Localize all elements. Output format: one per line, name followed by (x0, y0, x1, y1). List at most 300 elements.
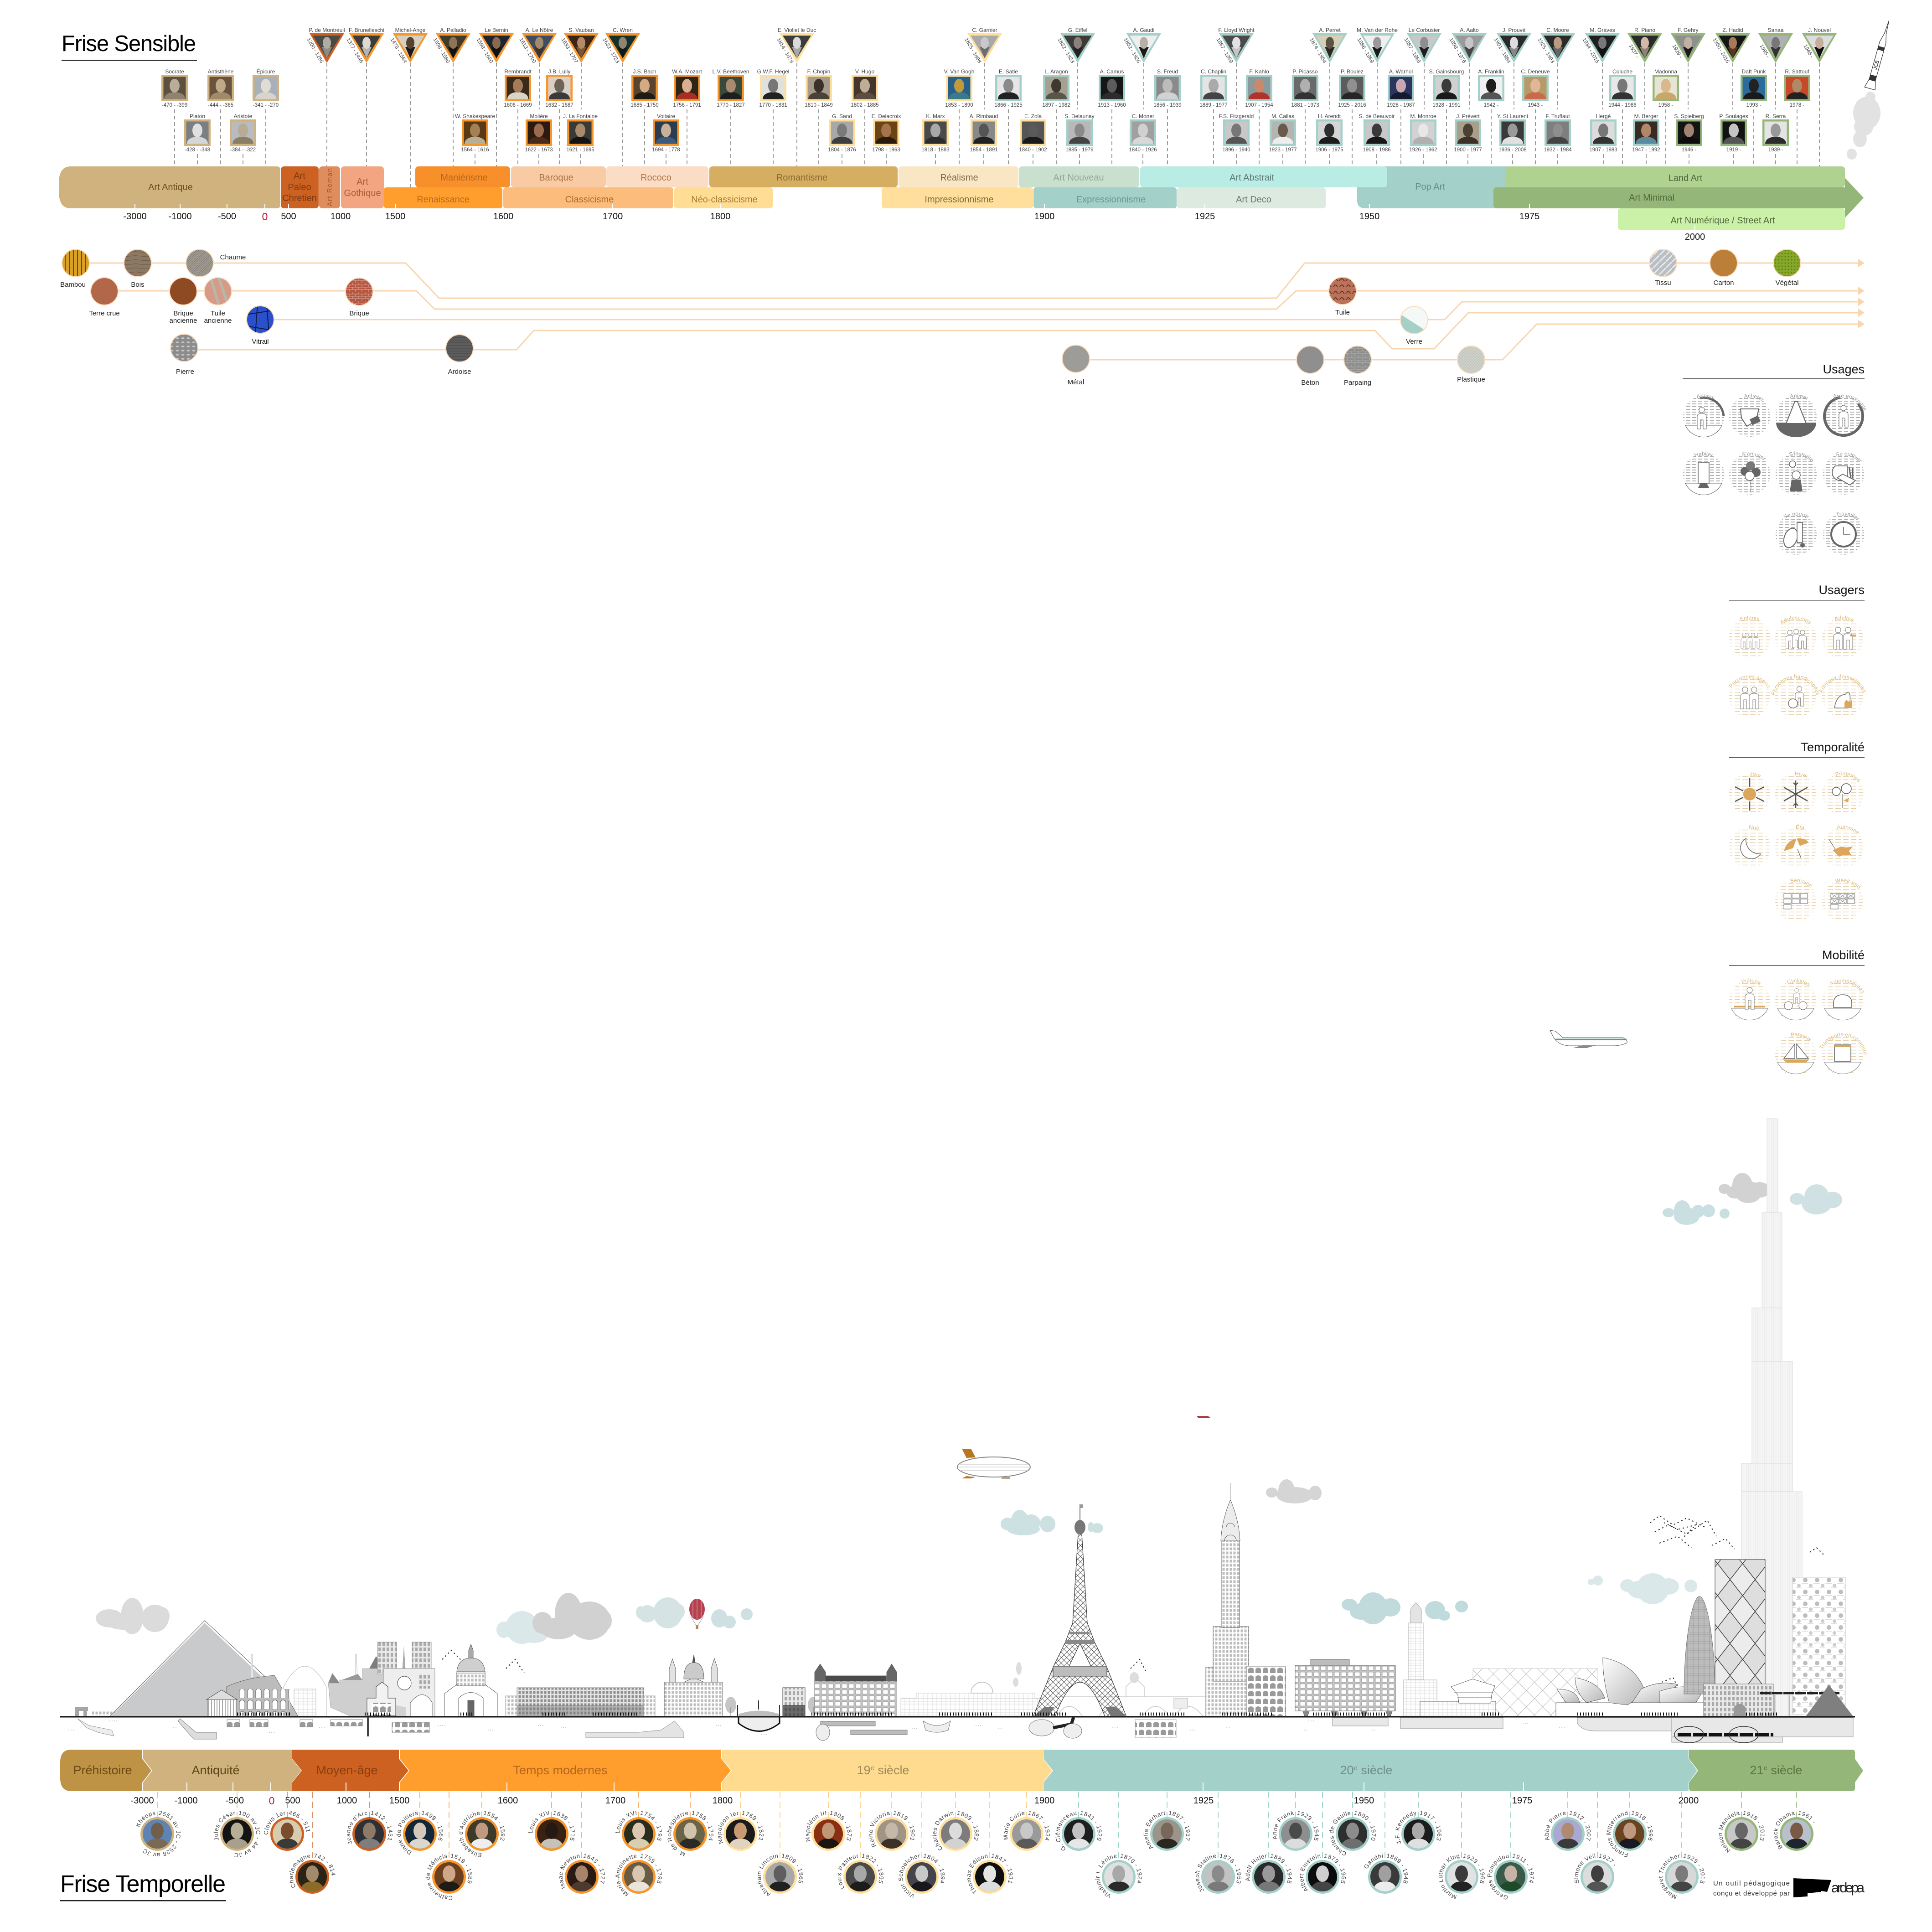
icon: Abriter (1683, 393, 1724, 437)
portrait: A. Palladio: 1508 - 1580 (432, 37, 450, 64)
portrait: Isaac Newton (557, 1852, 606, 1894)
portrait: Sanaa: 1995 - (1758, 44, 1771, 59)
top time axis: 1500 (385, 212, 405, 222)
portrait: Molière (525, 113, 553, 153)
portrait: Nelson Mandela (1717, 1809, 1766, 1854)
portrait: Joseph Staline (1193, 1852, 1243, 1894)
panel: triangular architect portraits (305, 27, 1837, 64)
portrait: E. Delacroix (872, 113, 901, 153)
portrait: M. Callas: M. Callas (1271, 113, 1294, 119)
heading: Mobilité: Mobilité (1822, 948, 1865, 962)
portrait: R. Sattouf (1784, 68, 1810, 108)
portrait: J. Prouvé: 1901 - 1984 (1493, 37, 1512, 64)
portrait: A. Camus: A. Camus (1100, 68, 1124, 75)
portrait: M. Berger: M. Berger (1634, 113, 1658, 119)
portrait: Le Corbusier: 1887 - 1965 (1403, 37, 1421, 64)
portrait: A. Franklin: A. Franklin (1478, 68, 1504, 75)
portrait: E. Satie: 1866 - 1925 (994, 103, 1023, 108)
top time axis: 500 (281, 212, 296, 222)
bottom time axis: 1800 (713, 1796, 733, 1806)
portrait: F. Chopin: 1810 - 1849 (805, 103, 833, 108)
monument: Romanesque castle (328, 1656, 396, 1716)
portrait: C. Moore (1536, 27, 1575, 64)
portrait: Sanaa: Sanaa (1768, 27, 1784, 33)
monument: domed basilica (444, 1644, 497, 1716)
portrait: P. Soulages: 1919 - (1726, 147, 1741, 153)
portrait: M. Callas (1269, 113, 1297, 153)
portrait: J.S. Bach (630, 68, 659, 108)
portrait: Abraham Lincoln: Abraham Lincoln (755, 1852, 779, 1898)
portrait: F. Brunelleschi: 1377 - 1446 (345, 37, 364, 64)
building: Guggenheim (1420, 1679, 1496, 1717)
portrait: Clovis 1er: Clovis 1er (263, 1809, 286, 1835)
portrait: E. Viollet le Duc (775, 27, 816, 64)
portrait: R. Piano: R. Piano (1634, 27, 1655, 33)
icon: Piétons: Piétons (1741, 977, 1762, 986)
portrait: Anne Frank: 1929 - 1945 (1297, 1809, 1320, 1842)
portrait: E. Zola: 1840 - 1902 (1019, 147, 1047, 153)
cloud: top blue left (1663, 1200, 1730, 1225)
portrait: S. de Beauvoir: 1908 - 1986 (1363, 147, 1391, 153)
bar: 19e siècle: siècle (874, 1763, 909, 1777)
cloud: pale blue right (1588, 1573, 1697, 1604)
material: Bois (124, 249, 151, 289)
portrait: Antisthène (207, 68, 234, 108)
portrait: Hergé (1589, 113, 1617, 153)
portrait: A. Palladio (432, 27, 470, 64)
bar: Art Deco (1177, 187, 1326, 208)
bar: Moyen-âge (292, 1750, 408, 1791)
portrait: Charlemagne: Charlemagne (288, 1852, 311, 1889)
underground: parking and tunnels (1333, 1718, 1853, 1742)
icon: Acheter: Acheter (1743, 393, 1765, 403)
portrait: E. Viollet le Duc: E. Viollet le Duc (778, 27, 816, 33)
icon: Automne: Automne (1836, 824, 1861, 836)
bar: Art Numérique / Street Art: Art Numérique / Street Art (1671, 216, 1775, 226)
panel: Temporalité (1729, 740, 1865, 921)
panel: materials (60, 249, 1801, 387)
material: Bois: Bois (131, 281, 145, 289)
portrait: Margaret Thatcher: Margaret Thatcher (1657, 1852, 1680, 1901)
portrait: François Mitterrand: François Mitterrand (1605, 1809, 1629, 1859)
portrait: J.B. Lully: 1632 - 1687 (545, 103, 573, 108)
portrait: M. de Robespierre: M. de Robespierre (666, 1809, 689, 1858)
portrait: Y. St Laurent (1497, 113, 1529, 153)
bottom time axis: -500 (226, 1796, 244, 1806)
portrait: S. Freud (1153, 68, 1182, 108)
material: Plastique (1457, 346, 1485, 383)
portrait: A. Palladio: A. Palladio (440, 27, 466, 33)
building: Crystal Palace (901, 1662, 1040, 1717)
bar: Antiquité: Antiquité (191, 1763, 240, 1777)
portrait: A. Warhol (1387, 68, 1415, 108)
portrait: V. Hugo: V. Hugo (855, 68, 874, 75)
material: Vitrail (246, 305, 274, 344)
portrait: L. Aragon: 1897 - 1982 (1042, 103, 1070, 108)
building: Burj Khalifa (1741, 1119, 1802, 1717)
portrait: Khéops: 2551 av JC - 2528 av JC (141, 1809, 182, 1859)
credit and logo: Un outil pédagogique (1713, 1880, 1790, 1887)
icon: Se nourrir (1776, 511, 1817, 555)
bridge (738, 1700, 780, 1731)
bar: Art Abstrait (1140, 166, 1387, 187)
bar: Temps modernes (400, 1750, 731, 1791)
material: Verre: Verre (1406, 338, 1422, 346)
bar: Art Paleo Chretien: Art (294, 171, 305, 181)
portrait: Sanaa (1758, 27, 1793, 63)
portrait: J. Prouvé (1493, 27, 1531, 64)
bar: Art Gothique (341, 166, 384, 208)
portrait: Voltaire: Voltaire (657, 113, 675, 119)
portrait: S. de Beauvoir: S. de Beauvoir (1359, 113, 1395, 119)
portrait: Isaac Newton: 1643 - 1727 (583, 1852, 606, 1885)
portrait: Vladimir I. Lénine: 1870 - 1924 (1120, 1852, 1143, 1885)
portrait: Amelia Earhart: Amelia Earhart (1142, 1809, 1166, 1851)
bottom time axis: 500 (285, 1796, 300, 1806)
bottom time axis: 1500 (389, 1796, 409, 1806)
portrait: Nelson Mandela: Nelson Mandela (1717, 1809, 1741, 1854)
bar: Baroque (511, 166, 606, 187)
cloud: blue behind grey (496, 1611, 547, 1644)
portrait: Victor Schoelcher: 1804 - 1894 (923, 1852, 946, 1885)
portrait: Abraham Lincoln: 1809 - 1865 (781, 1852, 805, 1885)
bar: 21e siècle (1689, 1750, 1863, 1791)
portrait: P. Picasso: P. Picasso (1292, 68, 1318, 75)
material: Brique: Brique (349, 310, 369, 317)
bar: Romantisme (709, 166, 898, 187)
portrait: Georges Pompidou (1486, 1852, 1535, 1901)
portrait: M. Graves (1581, 27, 1620, 64)
title: Frise Sensible: Frise Sensible (62, 31, 196, 56)
portrait: A. Camus (1098, 68, 1126, 108)
portrait: Platon: Platon (190, 113, 205, 119)
panel: square portraits lower row (184, 113, 1789, 153)
bar: Art Roman: Art Roman (326, 167, 334, 207)
portrait: Diane de Poitiers: Diane de Poitiers (395, 1809, 419, 1856)
portrait: E. Zola (1019, 113, 1047, 153)
bar: Art Minimal arrow: Art Minimal (1629, 193, 1674, 203)
icon: Printemps: Printemps (1834, 770, 1862, 783)
portrait: G. Eiffel: 1832 - 1923 (1056, 37, 1075, 64)
portrait: Adolf Hitler: Adolf Hitler (1244, 1852, 1267, 1881)
material: Végétal: Végétal (1776, 279, 1798, 287)
portrait: Madonna: 1958 - (1658, 103, 1673, 108)
bar: Antiquité (143, 1750, 301, 1791)
portrait: Marie Curie (1002, 1809, 1051, 1851)
portrait: Épicure: -341 - -270 (253, 103, 279, 108)
portrait: M. Graves: M. Graves (1590, 27, 1615, 33)
monument: Colosseum (227, 1675, 298, 1716)
portrait: S. Gainsbourg (1429, 68, 1464, 108)
portrait: G. Eiffel: G. Eiffel (1068, 27, 1087, 33)
material: Bambou (60, 249, 89, 289)
portrait: Louis Pasteur (836, 1852, 885, 1894)
portrait: Aristote: Aristote (234, 113, 253, 119)
icon: Automne (1822, 824, 1863, 868)
portrait: Margaret Thatcher: 1925 - 2013 (1683, 1852, 1706, 1885)
portrait: Molière: 1622 - 1673 (525, 147, 553, 153)
portrait: S. Gainsbourg: S. Gainsbourg (1429, 68, 1464, 75)
portrait: Albert Einstein: 1879 - 1955 (1323, 1852, 1347, 1885)
portrait: A. Franklin (1478, 68, 1504, 108)
portrait: G.W.F. Hegel: 1770 - 1831 (759, 103, 787, 108)
portrait: Charlemagne: 742 - 814 (313, 1852, 337, 1876)
portrait: Adolf Hitler (1244, 1852, 1293, 1894)
portrait: Michel-Ange (389, 27, 428, 64)
portrait: G. Sand: G. Sand (832, 113, 852, 119)
portrait: Rembrandt (504, 68, 532, 108)
portrait: Catherine de Médicis (424, 1852, 474, 1901)
icon: Abriter: Abriter (1696, 393, 1715, 401)
portrait: G. Clémenceau (1054, 1809, 1103, 1852)
portrait: Abbé Pierre: Abbé Pierre (1543, 1809, 1567, 1841)
building: Unité d'habitation (1295, 1659, 1395, 1716)
portrait: C. Garnier: 1825 - 1898 (963, 37, 982, 64)
portrait: Aristote: -384 - -322 (230, 147, 256, 153)
portrait: Louis XIV: 1638 - 1715 (553, 1809, 576, 1842)
portrait: C. Moore: C. Moore (1546, 27, 1569, 33)
bar: 19e siècle (722, 1750, 1052, 1791)
portrait: C. Deneuve (1521, 68, 1550, 108)
portrait: F. Lloyd Wright: 1867 - 1959 (1215, 37, 1234, 64)
portrait: Joseph Staline: 1878 - 1953 (1219, 1852, 1243, 1885)
portrait: S. Freud: 1856 - 1939 (1153, 103, 1182, 108)
material: Béton (1297, 346, 1324, 387)
portrait: C. Garnier: C. Garnier (972, 27, 997, 33)
portrait: F. Gehry (1671, 27, 1705, 63)
underground: cave (77, 1719, 114, 1736)
bar: Néo-classicisme: Néo-classicisme (691, 195, 758, 205)
bar: Art Paleo Chretien: Chretien (282, 193, 317, 203)
portrait: Khéops: Khéops (134, 1809, 156, 1828)
portrait: J.F. Kennedy: 1917 - 1963 (1419, 1809, 1443, 1842)
bar: Renaissance (384, 187, 502, 208)
portrait: C. Chaplin (1199, 68, 1228, 108)
portrait: E. Delacroix: 1798 - 1863 (872, 147, 900, 153)
portrait: Napoléon III (804, 1809, 853, 1851)
portrait: R. Piano (1627, 27, 1662, 63)
portrait: F. Truffaut: F. Truffaut (1545, 113, 1570, 119)
portrait: J.F. Kennedy: J.F. Kennedy (1394, 1809, 1417, 1845)
panel: historic figures (134, 1809, 1818, 1901)
underground: soil specks (68, 1721, 1565, 1735)
portrait: Barack Obama: Barack Obama (1772, 1809, 1796, 1851)
portrait: Victor Schoelcher (897, 1852, 946, 1900)
portrait: Louis Pasteur: Louis Pasteur (836, 1852, 859, 1891)
bar: Rococo (606, 166, 708, 187)
icon: S'amuser (1729, 450, 1770, 495)
zeppelin (957, 1449, 1030, 1479)
portrait: G.W.F. Hegel: G.W.F. Hegel (757, 68, 789, 75)
portrait: P. de Montreuil: P. de Montreuil (309, 27, 345, 33)
portrait: L.V. Beethoven: 1770 - 1827 (717, 103, 745, 108)
portrait: M. Monroe: 1926 - 1962 (1409, 147, 1437, 153)
rocket and smoke: JCB (1873, 60, 1880, 70)
portrait: M. Van der Rohe: 1886 - 1969 (1356, 37, 1374, 64)
bottom time axis: 1600 (498, 1796, 518, 1806)
panel: art movement bars (59, 166, 1864, 230)
bottom time axis: 1975 (1512, 1796, 1532, 1806)
heading: Temporalité: Temporalité (1801, 740, 1865, 754)
icon: Personnes âgées: Personnes âgées (1728, 673, 1772, 689)
portrait: A. Le Nôtre: A. Le Nôtre (526, 27, 553, 33)
portrait: R. Piano: 1937 - (1627, 44, 1640, 59)
icon: Se nourrir: Se nourrir (1782, 511, 1810, 520)
material: Métal: Métal (1068, 378, 1084, 386)
monument: Sydney Opera (1556, 1658, 1705, 1717)
portrait: F. Lloyd Wright (1215, 27, 1255, 64)
bar: Pop Art (1357, 166, 1518, 208)
portrait: E. Satie (994, 68, 1023, 108)
portrait: Socrate: Socrate (165, 68, 184, 75)
bar: Préhistoire (60, 1750, 151, 1791)
bar: Pop Art: Pop Art (1415, 182, 1445, 192)
portrait: Hergé: Hergé (1596, 113, 1611, 119)
bottom time axis: 0 (269, 1795, 274, 1807)
portrait: F. Truffaut: 1932 - 1984 (1544, 147, 1572, 153)
tree (725, 1697, 819, 1716)
portrait: S. Delaunay (1064, 113, 1095, 153)
portrait: P. Picasso: 1881 - 1973 (1291, 103, 1319, 108)
portrait: Vladimir I. Lénine: Vladimir I. Lénine (1094, 1852, 1118, 1900)
portrait: C. Chaplin: 1889 - 1977 (1199, 103, 1228, 108)
portrait: M. de Robespierre (666, 1809, 715, 1858)
monument: Stonehenge (75, 1707, 119, 1716)
bar: Art Gothique: Art (356, 177, 368, 187)
portrait: Thomas Edison: Thomas Edison (965, 1852, 989, 1896)
portrait: Le Bernin (475, 27, 514, 64)
portrait: Elisabeth d'Autriche: Elisabeth d'Autriche (457, 1809, 482, 1859)
top time axis: -1000 (168, 212, 192, 222)
icon: Bateaux: Bateaux (1790, 1031, 1813, 1043)
portrait: J. Nouvel: J. Nouvel (1808, 27, 1831, 33)
portrait: M. Van der Rohe: M. Van der Rohe (1357, 27, 1398, 33)
portrait: Louis Pasteur: 1822 - 1895 (861, 1852, 885, 1885)
portrait: C. Wren (601, 27, 640, 64)
underground: burial chamber (178, 1719, 217, 1739)
material: Carton (1710, 249, 1737, 287)
icon: Travailler (1823, 511, 1864, 555)
portrait: Napoléon Ier: Napoléon Ier (716, 1809, 739, 1845)
top time axis: -3000 (123, 212, 147, 222)
credit and logo (1713, 1878, 1865, 1897)
icon: Piétons (1729, 977, 1770, 1022)
bar: Impressionnisme: Impressionnisme (925, 195, 994, 205)
portrait: K. Marx: K. Marx (926, 113, 945, 119)
monument: Pyramid (110, 1621, 304, 1716)
top time axis: 1800 (710, 212, 730, 222)
portrait: Martin Luther King: 1929 - 1968 (1462, 1852, 1486, 1885)
portrait: Martin Luther King (1437, 1852, 1486, 1901)
icon: Transports en commun (1818, 1031, 1869, 1075)
ground line (60, 1716, 1855, 1718)
portrait: Michel-Ange: Michel-Ange (395, 27, 426, 33)
credit and logo: ardepa (1831, 1880, 1865, 1896)
bottom time axis: -1000 (174, 1796, 198, 1806)
portrait: C. Chaplin: C. Chaplin (1201, 68, 1226, 75)
portrait: Molière: Molière (530, 113, 548, 119)
portrait: P. Boulez: P. Boulez (1341, 68, 1364, 75)
material: Tuile ancienne (204, 277, 232, 325)
portrait: A. Perret: 1874 - 1954 (1308, 37, 1328, 64)
small red plane (1197, 1416, 1210, 1418)
portrait: W.A. Mozart (672, 68, 702, 108)
bar: Expressionnisme (1033, 187, 1177, 208)
hot-air balloon (689, 1599, 705, 1629)
material: Brique ancienne: Brique (173, 310, 193, 317)
monument: Louvre pyramid (1806, 1685, 1853, 1716)
credit and logo: conçu et développé par (1713, 1890, 1790, 1897)
portrait: F. Kahlo: F. Kahlo (1249, 68, 1269, 75)
portrait: F.S. Fitzgerald: 1896 - 1940 (1222, 147, 1250, 153)
icon: Hiver: Hiver (1795, 770, 1809, 780)
top time axis: 1700 (603, 212, 623, 222)
portrait: S. Gainsbourg: 1928 - 1991 (1432, 103, 1461, 108)
material: Plastique: Plastique (1457, 376, 1485, 383)
building: Pompidou Centre (1473, 1669, 1598, 1717)
portrait: Barack Obama (1772, 1809, 1818, 1851)
portrait: Charlemagne (288, 1852, 337, 1894)
material: Pierre: Pierre (176, 368, 194, 376)
bottom time axis: 1700 (605, 1796, 625, 1806)
portrait: A. Franklin: 1942 - (1484, 103, 1498, 108)
icon: Se cultiver: Se cultiver (1835, 450, 1863, 464)
portrait: Antisthène: -444 - -365 (208, 103, 233, 108)
icon: Animer (1776, 393, 1817, 437)
top time axis: -500 (218, 212, 236, 222)
bar: Réalisme: Réalisme (940, 173, 978, 183)
portrait: Le Bernin: Le Bernin (485, 27, 508, 33)
portrait: Abbé Pierre: 1912 - 2007 (1569, 1809, 1592, 1842)
portrait: E. Delacroix: E. Delacroix (872, 113, 901, 119)
portrait: G. Clémenceau: 1841 - 1929 (1080, 1809, 1103, 1842)
portrait: J. Prouvé: J. Prouvé (1503, 27, 1526, 33)
portrait: R. Serra: 1939 - (1768, 147, 1783, 153)
portrait: Amelia Earhart (1142, 1809, 1192, 1851)
portrait: Socrate (161, 68, 188, 108)
bar: 19e siècle: e (871, 1764, 874, 1772)
portrait: Abbé Pierre (1543, 1809, 1592, 1851)
portrait: Marie-Antoinette: 1755 - 1793 (640, 1852, 663, 1885)
elevated train (1760, 1693, 1839, 1717)
portrait: W. Shakespeare: W. Shakespeare (455, 113, 495, 119)
icon: Nuit (1729, 824, 1770, 868)
portrait: Rembrandt: Rembrandt (504, 68, 532, 75)
portrait: R. Serra: R. Serra (1766, 113, 1786, 119)
icon: S'instruire: S'instruire (1788, 450, 1815, 463)
portrait: Charles Darwin: 1809 - 1882 (956, 1809, 980, 1842)
portrait: Thomas Edison: 1847 - 1931 (991, 1852, 1014, 1885)
portrait: G. Eiffel (1056, 27, 1095, 64)
portrait: Z. Hadid: Z. Hadid (1722, 27, 1743, 33)
building: white block (1246, 1666, 1286, 1717)
monument: Romanesque church (367, 1682, 396, 1716)
portrait: A. Gaudi (1122, 27, 1161, 64)
material: Parpaing (1344, 346, 1371, 387)
material: Ardoise: Ardoise (448, 368, 471, 376)
portrait: Catherine de Médicis: Catherine de Médicis (424, 1852, 453, 1901)
portrait: Diane de Poitiers: 1499 - 1566 (421, 1809, 444, 1842)
building: department store (815, 1664, 897, 1717)
portrait: Épicure: Épicure (257, 68, 275, 75)
bar: Néo-classicisme (674, 187, 773, 208)
bar: Expressionnisme: Expressionnisme (1076, 195, 1146, 205)
top time axis: 1975 (1519, 212, 1539, 222)
portrait: M. Graves: 1934 - 2015 (1581, 37, 1600, 64)
icon: Adolescents (1775, 615, 1816, 659)
portrait: Adolf Hitler: 1889 - 1945 (1270, 1852, 1293, 1885)
portrait: Charles de Gaulle (1328, 1809, 1377, 1857)
